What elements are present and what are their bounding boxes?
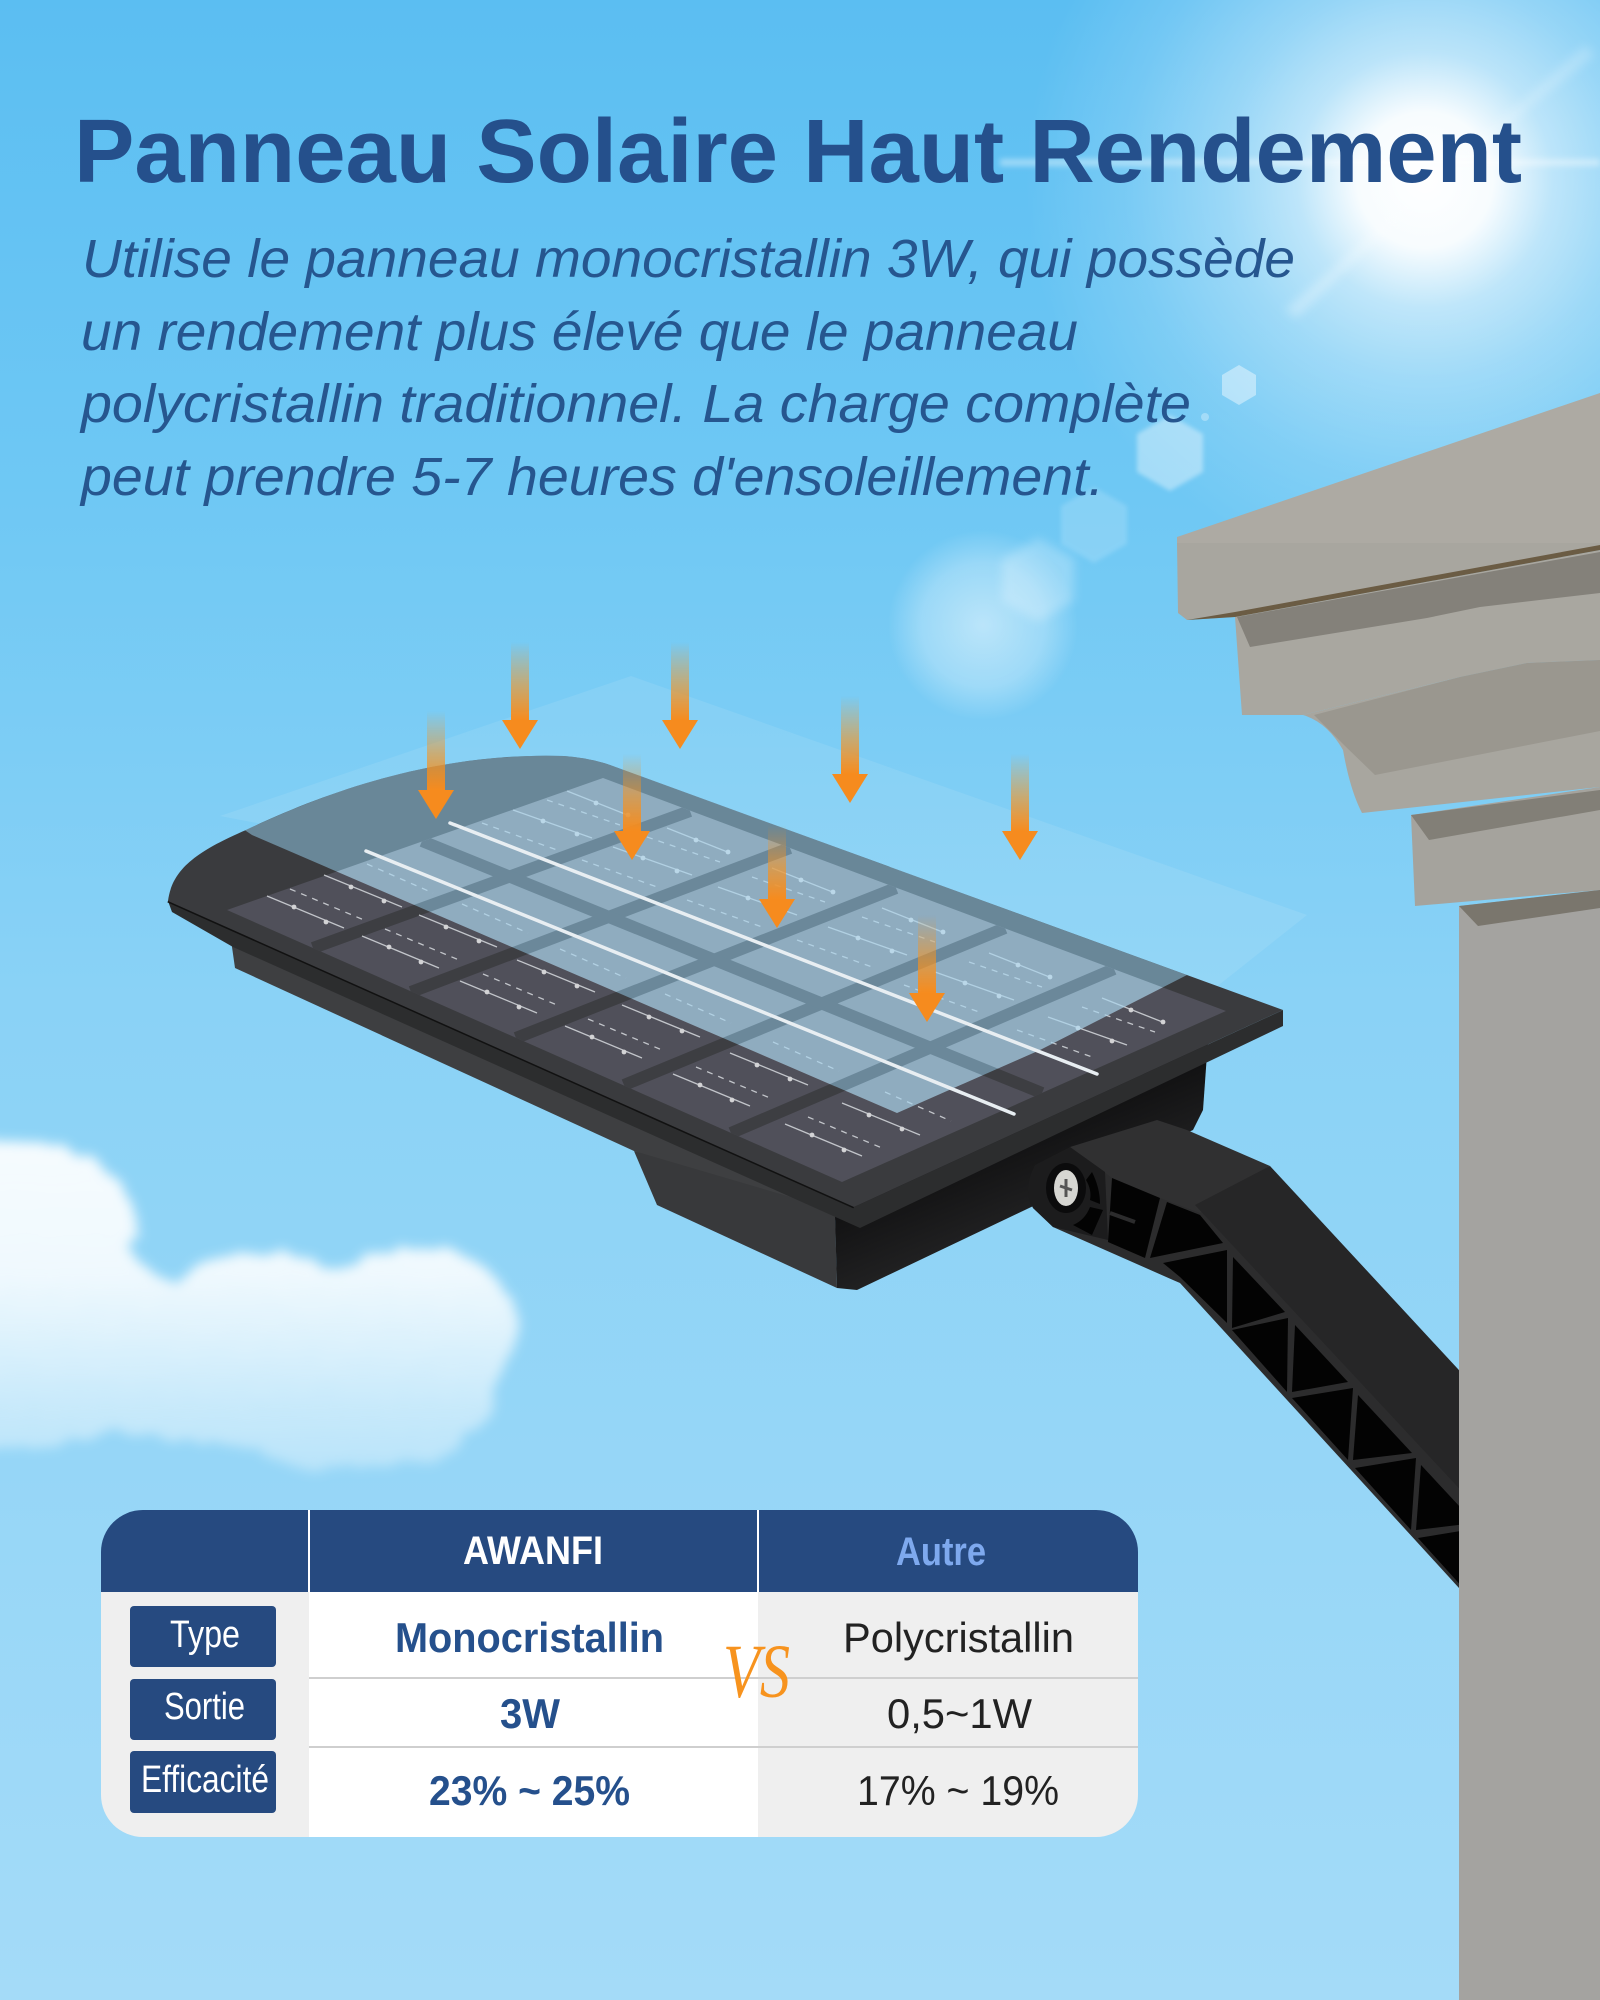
comparison table: Monocristallin [395, 1614, 664, 1661]
faint light plane behind the panel [220, 676, 1307, 1000]
comparison table: 0,5~1W [887, 1690, 1032, 1737]
glass reflection on panel [200, 740, 1190, 1113]
comparison table: Efficacité [141, 1759, 269, 1801]
description paragraph: Utilise le panneau monocristallin 3W, qui possède [82, 229, 1295, 289]
cloud [0, 1140, 519, 1472]
white busbars [366, 823, 1097, 1114]
comparison table [101, 1510, 1138, 1837]
comparison table: 23% ~ 25% [429, 1767, 630, 1814]
wall column [1459, 890, 1600, 2000]
comparison table: Type [170, 1614, 240, 1656]
comparison table: AWANFI [463, 1529, 603, 1573]
solar panel body [168, 756, 1283, 1290]
cornice [1177, 393, 1600, 906]
comparison table: Sortie [164, 1686, 245, 1728]
comparison table: 17% ~ 19% [857, 1767, 1059, 1814]
title: Panneau Solaire Haut Rendement [74, 102, 1522, 202]
hinge with screw [1028, 1147, 1108, 1240]
comparison table: Autre [896, 1530, 986, 1574]
sunlight arrows [418, 642, 1038, 1022]
description paragraph: peut prendre 5-7 heures d'ensoleillement. [79, 447, 1104, 507]
description paragraph: un rendement plus élevé que le panneau [81, 302, 1078, 362]
sun with rays [1000, 0, 1600, 580]
comparison table: Polycristallin [843, 1614, 1074, 1661]
description paragraph: polycristallin traditionnel. La charge complète [79, 374, 1191, 434]
comparison table: 3W [500, 1690, 560, 1737]
mounting arm with lattice ribs [1033, 1120, 1479, 1600]
lens flare hexagons [888, 365, 1256, 720]
description paragraph [79, 229, 1295, 507]
solar cells grid [228, 778, 1226, 1182]
comparison table: VS [723, 1630, 790, 1714]
